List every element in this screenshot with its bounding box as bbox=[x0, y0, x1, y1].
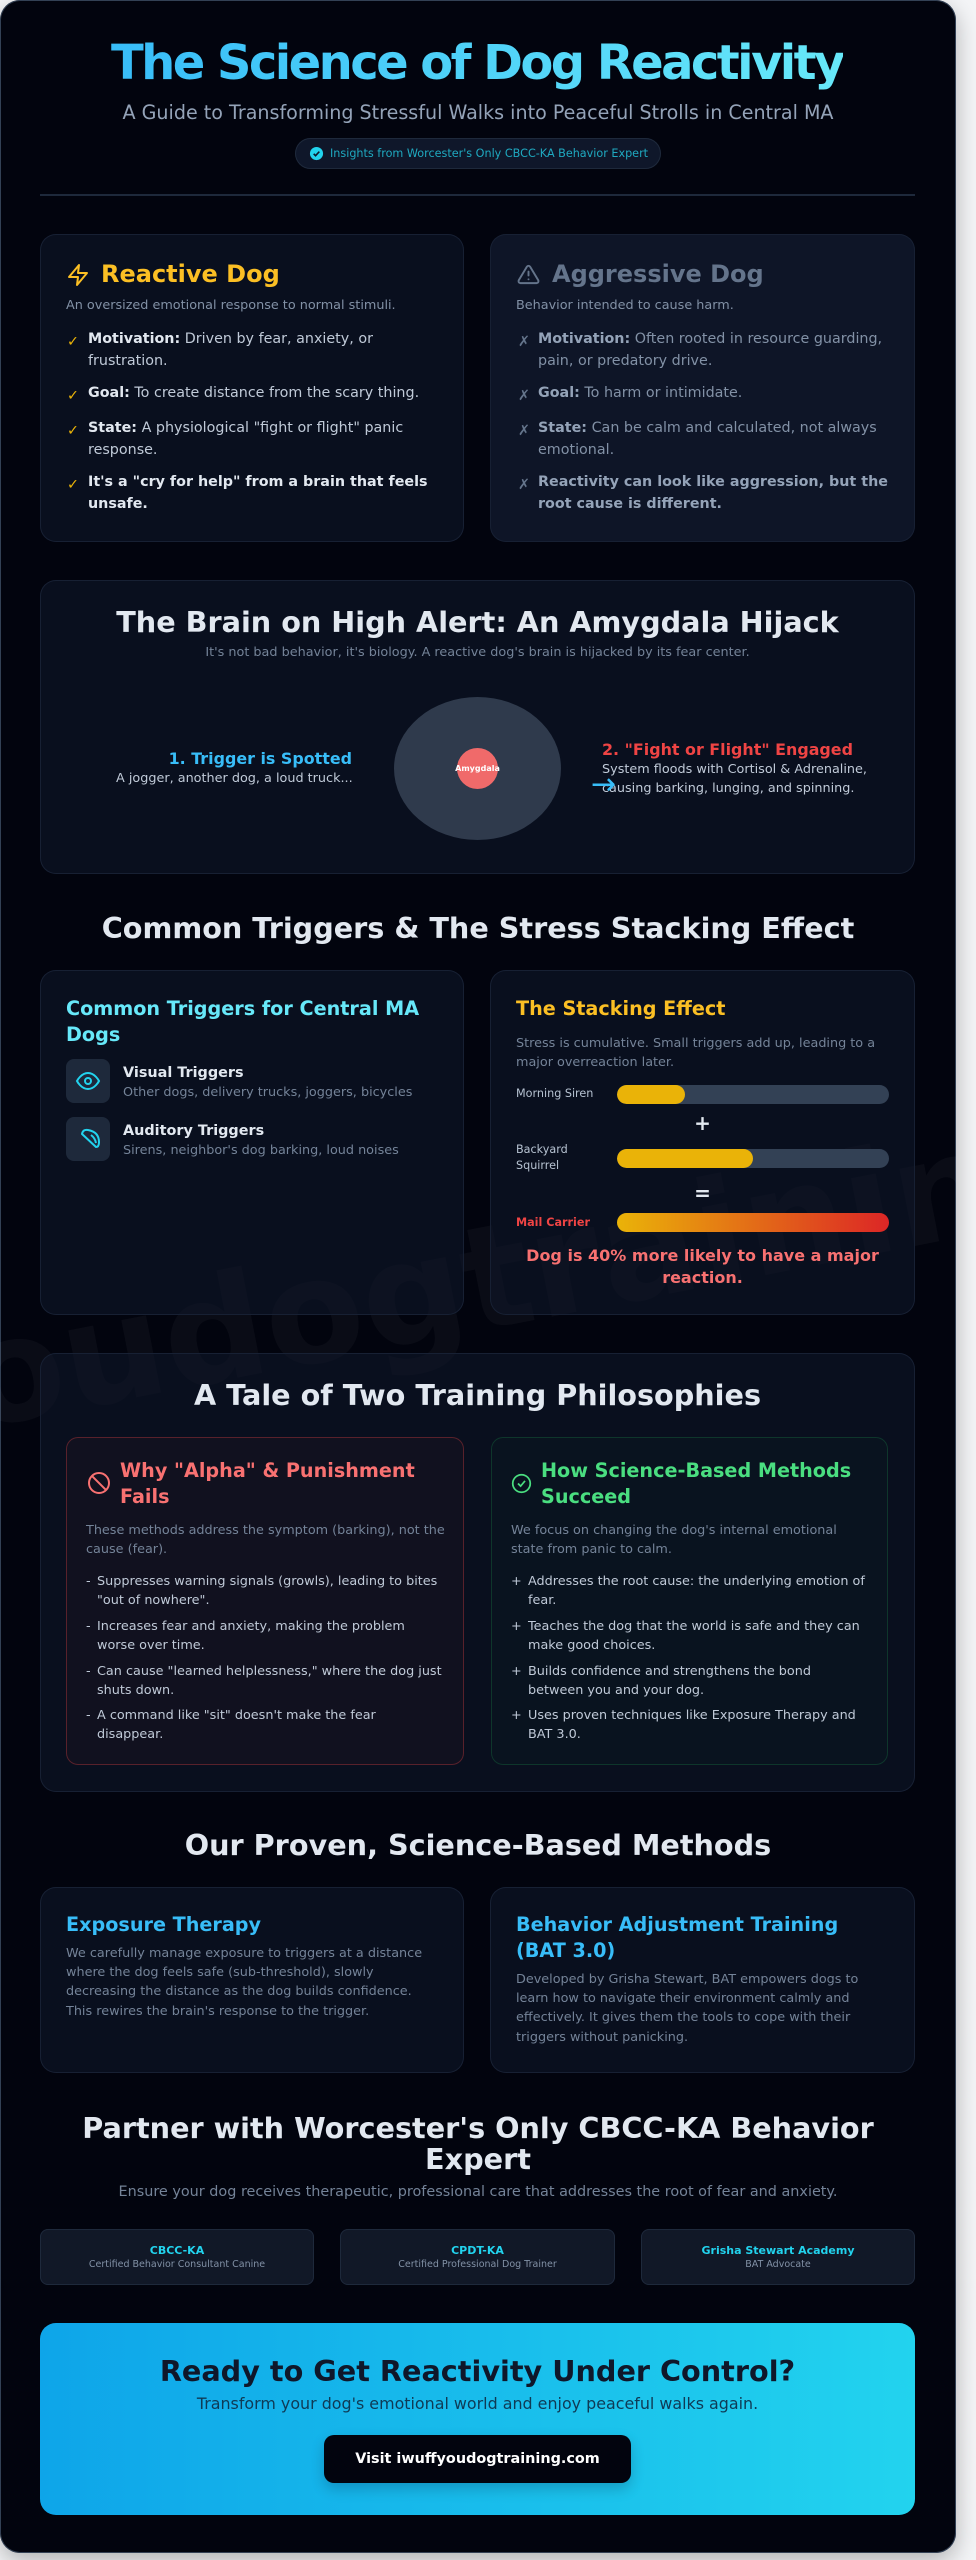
list item: reactivity vs aggression: Reactivity can look like aggression, but the bbox=[538, 474, 888, 490]
list item: cry for help: ✓ bbox=[67, 477, 79, 493]
bullet 1 bbox=[511, 1574, 866, 1608]
heading: Why "Alpha" & Punishment bbox=[120, 1459, 415, 1482]
badge bbox=[295, 138, 661, 169]
visual triggers: Other dogs, delivery trucks, joggers, bicycles bbox=[123, 1085, 412, 1100]
icon: lightning bolt bbox=[68, 264, 88, 286]
result: Dog is 40% more likely to have a major bbox=[526, 1246, 879, 1265]
list item: motivation: Motivation: Driven by fear, anxiety, or bbox=[88, 331, 373, 347]
list item: state: ✗ bbox=[518, 423, 530, 439]
arrow: → bbox=[591, 767, 616, 802]
description: learn how to navigate their environment calmly and bbox=[516, 1991, 850, 2006]
equals operator: = bbox=[694, 1181, 711, 1205]
list item: motivation bbox=[518, 331, 882, 369]
credential: CBCC-KA: Certified Behavior Consultant Canine bbox=[89, 2259, 265, 2270]
bullet 3: between you and your dog. bbox=[528, 1683, 704, 1698]
step 2: fight or flight: System floods with Cortisol & Adrenaline, bbox=[602, 762, 867, 777]
diagram: brain bbox=[394, 697, 561, 840]
heading: Dogs bbox=[66, 1023, 120, 1046]
bullet 2 bbox=[511, 1619, 860, 1653]
step 2: fight or flight: causing barking, lunging, and spinning. bbox=[602, 781, 854, 796]
visual triggers bbox=[123, 1065, 412, 1100]
CTA text: Transform your dog's emotional world and enjoy peaceful walks again. bbox=[197, 2394, 758, 2413]
panel: science-based succeed bbox=[491, 1437, 888, 1765]
bullet 3 bbox=[86, 1664, 442, 1698]
description: decreasing the distance as the dog builds confidence. bbox=[66, 1984, 412, 1999]
list item: state bbox=[518, 420, 877, 458]
panel: common triggers bbox=[40, 970, 464, 1315]
heading: Exposure Therapy bbox=[66, 1913, 261, 1936]
bullet 1: fear. bbox=[528, 1593, 556, 1608]
plus operator: + bbox=[694, 1111, 711, 1135]
heading: How Science-Based Methods bbox=[541, 1459, 851, 1482]
list item: goal: ✗ bbox=[518, 388, 530, 404]
description: state from panic to calm. bbox=[511, 1542, 672, 1557]
list item: reactivity vs aggression: root cause is different. bbox=[538, 496, 722, 512]
credential: Grisha Stewart Academy bbox=[641, 2229, 915, 2285]
heading: The Brain on High Alert: An Amygdala Hijack bbox=[116, 605, 839, 639]
heading: Succeed bbox=[541, 1485, 631, 1508]
icon: check circle bbox=[512, 1474, 532, 1494]
list item: motivation: frustration. bbox=[88, 353, 168, 369]
description: Stress is cumulative. Small triggers add up, leading to a bbox=[516, 1036, 875, 1051]
bullet 4: + bbox=[511, 1708, 522, 1723]
credential: CPDT-KA: Certified Professional Dog Trainer bbox=[398, 2259, 557, 2270]
credential: Grisha Stewart Academy: BAT Advocate bbox=[745, 2259, 811, 2270]
bullet 4: disappear. bbox=[97, 1727, 163, 1742]
credential: Grisha Stewart Academy: Grisha Stewart Academy bbox=[701, 2244, 855, 2257]
title: The Science of Dog Reactivity bbox=[111, 35, 843, 91]
bullet 2: worse over time. bbox=[97, 1638, 205, 1653]
list item: motivation: ✓ bbox=[67, 334, 79, 350]
auditory triggers: Sirens, neighbor's dog barking, loud noises bbox=[123, 1143, 399, 1158]
section heading: methods: Our Proven, Science-Based Methods bbox=[185, 1828, 771, 1862]
bullet 2 bbox=[86, 1619, 405, 1653]
bullet 4: A command like "sit" doesn't make the fear bbox=[97, 1708, 376, 1723]
bullet 1: - bbox=[86, 1574, 91, 1589]
label: backyard squirrel: Squirrel bbox=[516, 1159, 559, 1172]
description bbox=[86, 1523, 445, 1557]
list item: goal: Goal: To create distance from the scary thing. bbox=[88, 385, 419, 401]
credential: CBCC-KA bbox=[40, 2229, 314, 2285]
description bbox=[516, 1036, 875, 1070]
bullet 2: Teaches the dog that the world is safe and they can bbox=[528, 1619, 860, 1634]
icon: ear bbox=[66, 1117, 110, 1161]
CTA button bbox=[324, 2435, 631, 2483]
bullet 3 bbox=[511, 1664, 811, 1698]
amygdala bbox=[457, 748, 498, 789]
heading: Aggressive Dog bbox=[552, 260, 764, 288]
visual triggers: Visual Triggers bbox=[123, 1065, 244, 1081]
heading bbox=[516, 1913, 838, 1962]
heading: A Tale of Two Training Philosophies bbox=[194, 1378, 761, 1412]
description: major overreaction later. bbox=[516, 1055, 674, 1070]
list item: state: State: A physiological "fight or flight" panic bbox=[88, 420, 403, 436]
list item: motivation: Motivation: Often rooted in resource guarding, bbox=[538, 331, 882, 347]
header bbox=[40, 35, 915, 196]
bullet 1: + bbox=[511, 1574, 522, 1589]
list item: reactivity vs aggression bbox=[518, 474, 888, 512]
bullet 1: Suppresses warning signals (growls), leading to bites bbox=[97, 1574, 437, 1589]
label: mail carrier: Mail Carrier bbox=[516, 1216, 590, 1229]
description: where the dog feels safe (sub-threshold), slowly bbox=[66, 1965, 374, 1980]
description: This rewires the brain's response to the trigger. bbox=[66, 2004, 369, 2019]
bullet 3: Can cause "learned helplessness," where the dog just bbox=[97, 1664, 442, 1679]
auditory triggers: Auditory Triggers bbox=[123, 1123, 264, 1139]
description bbox=[66, 1946, 422, 2019]
heading: Fails bbox=[120, 1485, 170, 1508]
icon: eye bbox=[66, 1059, 110, 1103]
panel: exposure therapy bbox=[40, 1887, 464, 2073]
heading bbox=[120, 1459, 415, 1508]
description: effectively. It gives them the tools to cope with their bbox=[516, 2010, 850, 2025]
list item: state: emotional. bbox=[538, 442, 614, 458]
description: Developed by Grisha Stewart, BAT empowers dogs to bbox=[516, 1972, 858, 1987]
bar: backyard squirrel 50% bbox=[617, 1149, 889, 1168]
panel: amygdala hijack bbox=[40, 580, 915, 874]
description: We carefully manage exposure to triggers at a distance bbox=[66, 1946, 422, 1961]
description: These methods address the symptom (barking), not the bbox=[86, 1523, 445, 1538]
bullet 1: Addresses the root cause: the underlying emotion of bbox=[528, 1574, 865, 1589]
list item: state bbox=[67, 420, 403, 458]
step 1: trigger bbox=[116, 749, 353, 786]
subtitle: A Guide to Transforming Stressful Walks into Peaceful Strolls in Central MA bbox=[122, 101, 834, 124]
panel: BAT 3.0 bbox=[490, 1887, 915, 2073]
description bbox=[516, 1972, 858, 2045]
list item: cry for help: unsafe. bbox=[88, 496, 148, 512]
bullet 2: make good choices. bbox=[528, 1638, 655, 1653]
bullet 4 bbox=[86, 1708, 376, 1742]
credential: CPDT-KA: CPDT-KA bbox=[451, 2244, 504, 2257]
bullet 1 bbox=[86, 1574, 437, 1608]
list item: cry for help: It's a "cry for help" from a brain that feels bbox=[88, 474, 428, 490]
bullet 2: Increases fear and anxiety, making the problem bbox=[97, 1619, 405, 1634]
amygdala: Amygdala bbox=[455, 764, 500, 773]
bullet 3: - bbox=[86, 1664, 91, 1679]
section heading: triggers: Common Triggers & The Stress Stacking Effect bbox=[102, 911, 854, 945]
badge text: Insights from Worcester's Only CBCC-KA Behavior Expert bbox=[330, 147, 648, 160]
description: triggers without panicking. bbox=[516, 2030, 688, 2045]
panel: stacking effect bbox=[490, 970, 915, 1315]
list item: cry for help bbox=[67, 474, 428, 512]
icon: ban bbox=[88, 1472, 110, 1494]
panel: aggressive dog bbox=[490, 234, 915, 542]
bullet 3: + bbox=[511, 1664, 522, 1679]
step 1: trigger: A jogger, another dog, a loud truck... bbox=[116, 771, 353, 786]
list item: state: State: Can be calm and calculated, not always bbox=[538, 420, 877, 436]
header divider bbox=[40, 194, 915, 196]
bullet 3: Builds confidence and strengthens the bond bbox=[528, 1664, 811, 1679]
bullet 4: BAT 3.0. bbox=[528, 1727, 581, 1742]
heading: (BAT 3.0) bbox=[516, 1939, 615, 1962]
list item: state: response. bbox=[88, 442, 157, 458]
section heading: partner: Partner with Worcester's Only CBCC-KA Behavior bbox=[82, 2111, 874, 2145]
description: We focus on changing the dog's internal emotional bbox=[511, 1523, 837, 1538]
call to action bbox=[40, 2323, 915, 2515]
heading: Reactive Dog bbox=[101, 260, 280, 288]
bullet 3: shuts down. bbox=[97, 1683, 174, 1698]
list item: motivation: ✗ bbox=[518, 334, 530, 350]
heading bbox=[66, 997, 419, 1046]
description: cause (fear). bbox=[86, 1542, 167, 1557]
description bbox=[511, 1523, 837, 1557]
step 2: fight or flight bbox=[602, 740, 867, 796]
result: reaction. bbox=[662, 1268, 743, 1287]
auditory triggers bbox=[123, 1123, 399, 1158]
panel: reactive dog bbox=[40, 234, 464, 542]
bullet 1: "out of nowhere". bbox=[97, 1593, 210, 1608]
label: morning siren: Morning Siren bbox=[516, 1087, 593, 1100]
list item: goal: Goal: To harm or intimidate. bbox=[538, 385, 742, 401]
credential: CPDT-KA bbox=[340, 2229, 615, 2285]
bullet 2: - bbox=[86, 1619, 91, 1634]
section heading: partner: Expert bbox=[425, 2142, 531, 2176]
partner subheading: Ensure your dog receives therapeutic, professional care that addresses the root of fear and anxiety. bbox=[118, 2184, 837, 2200]
icon: warning triangle bbox=[518, 264, 540, 284]
list item: motivation: pain, or predatory drive. bbox=[538, 353, 712, 369]
bullet 4 bbox=[511, 1708, 856, 1742]
bullet 4: - bbox=[86, 1708, 91, 1723]
heading: Common Triggers for Central MA bbox=[66, 997, 419, 1020]
heading bbox=[541, 1459, 851, 1508]
step 2: fight or flight: 2. "Fight or Flight" Engaged bbox=[602, 740, 853, 759]
subheading: It's not bad behavior, it's biology. A reactive dog's brain is hijacked by its fear center. bbox=[205, 645, 750, 660]
bullet 2: + bbox=[511, 1619, 522, 1634]
credential: CBCC-KA: CBCC-KA bbox=[150, 2244, 204, 2257]
bullet 4: Uses proven techniques like Exposure Therapy and bbox=[528, 1708, 856, 1723]
list item: motivation bbox=[67, 331, 373, 369]
bar: morning siren 25% bbox=[617, 1085, 889, 1104]
list item: reactivity vs aggression: ✗ bbox=[518, 477, 530, 493]
definition: An oversized emotional response to normal stimuli. bbox=[66, 298, 396, 313]
icon: badge check bbox=[310, 147, 324, 160]
result bbox=[526, 1246, 879, 1287]
heading: Behavior Adjustment Training bbox=[516, 1913, 838, 1936]
heading: The Stacking Effect bbox=[516, 997, 725, 1020]
definition: Behavior intended to cause harm. bbox=[516, 298, 734, 313]
list item: goal: ✓ bbox=[67, 388, 79, 404]
label: backyard squirrel: Backyard bbox=[516, 1143, 568, 1156]
CTA button: Visit iwuffyoudogtraining.com bbox=[355, 2451, 600, 2467]
label: backyard squirrel bbox=[516, 1143, 568, 1172]
CTA heading: Ready to Get Reactivity Under Control? bbox=[160, 2354, 795, 2388]
panel: punishment fails bbox=[66, 1437, 464, 1765]
section heading: partner bbox=[82, 2111, 874, 2176]
list item: state: ✓ bbox=[67, 423, 79, 439]
step 1: trigger: 1. Trigger is Spotted bbox=[169, 749, 352, 768]
bar: mail carrier 100% bbox=[617, 1213, 889, 1232]
panel: training philosophies bbox=[40, 1353, 915, 1792]
